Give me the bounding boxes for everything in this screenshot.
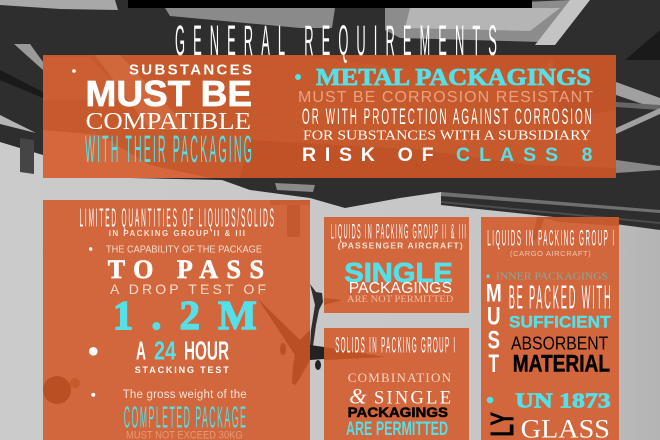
panel: liquids cargo aircraft xyxy=(481,217,619,440)
bullet xyxy=(91,393,95,397)
text: vertical must: M xyxy=(486,280,502,308)
text: risk of: RISK OF xyxy=(302,144,434,166)
text: gross weight: The gross weight of the xyxy=(123,389,247,401)
text: material: MATERIAL xyxy=(513,351,610,378)
text: be packed with: BE PACKED WITH xyxy=(509,280,611,317)
text: class 8: CLASS 8 xyxy=(456,144,593,166)
panel: limited quantities xyxy=(43,200,310,440)
text: rotated ly: LY xyxy=(483,412,520,437)
stat: 1.2 m: 1 . 2 M xyxy=(113,292,257,338)
text: completed package: COMPLETED PACKAGE xyxy=(124,399,246,434)
text: vertical must: U xyxy=(487,302,500,330)
subheading: packing group: IN PACKING GROUP II & III xyxy=(109,229,245,238)
bullet xyxy=(89,347,98,356)
text: drop test: A DROP TEST OF xyxy=(110,281,266,297)
text: packagings: PACKAGINGS xyxy=(349,280,452,297)
bullet xyxy=(487,397,493,403)
text: are not permitted: ARE NOT PERMITTED xyxy=(347,295,453,305)
plane in gap xyxy=(310,284,324,370)
text: packagings: PACKAGINGS xyxy=(348,405,448,420)
heading: limited quantities: LIMITED QUANTITIES OF LIQUIDS/SOLIDS xyxy=(80,205,274,234)
heading: general requirements: GENERAL REQUIREMENTS xyxy=(175,16,497,64)
text: or with protection against corrosion: OR WITH PROTECTION AGAINST CORROSION xyxy=(302,105,592,129)
subheading: (CARGO AIRCRAFT) xyxy=(510,249,591,258)
heading: LIQUIDS IN PACKING GROUP II & III xyxy=(331,221,466,244)
text: un 1873: UN 1873 xyxy=(515,388,611,412)
text: ampersand: & xyxy=(349,383,368,408)
text: are permitted: ARE PERMITTED xyxy=(346,418,448,440)
heading: SOLIDS IN PACKING GROUP I xyxy=(335,333,455,358)
plane shadow in panel xyxy=(258,299,310,385)
text: a 24 hour xyxy=(136,335,229,365)
text: with their packaging: WITH THEIR PACKAGING xyxy=(85,128,252,170)
text: absorbent: ABSORBENT xyxy=(511,332,608,353)
bullet xyxy=(72,69,76,73)
text: combination: COMBINATION xyxy=(348,370,452,385)
panel: general requirements xyxy=(43,16,616,178)
text: single: SINGLE xyxy=(344,257,453,288)
text: substances: SUBSTANCES xyxy=(129,62,252,78)
text: metal packagings: METAL PACKAGINGS xyxy=(316,65,591,91)
subheading: (PASSENGER AIRCRAFT) xyxy=(338,241,463,251)
text: stacking test: STACKING TEST xyxy=(135,365,229,375)
heading: LIQUIDS IN PACKING GROUP I xyxy=(487,226,614,251)
panel: solids packing group xyxy=(324,328,469,440)
text: a 24 hour: 24 xyxy=(154,335,176,365)
text: vertical must xyxy=(486,280,502,378)
text: capability: THE CAPABILITY OF THE PACKAGE xyxy=(106,245,262,256)
text: must be: MUST BE xyxy=(86,73,252,114)
text: to pass: TO PASS xyxy=(108,255,264,284)
text: for substances with a subsidiary: FOR SUBSTANCES WITH A SUBSIDIARY xyxy=(303,128,591,142)
bullet xyxy=(486,275,490,278)
panel: liquids passenger aircraft xyxy=(324,217,469,313)
bullet xyxy=(89,247,92,251)
text: must be corrosion resistant: MUST BE CORROSION RESISTANT xyxy=(298,89,593,106)
text: a 24 hour: A xyxy=(136,335,146,365)
text: inner packagings: INNER PACKAGINGS xyxy=(496,271,608,283)
text: compatible: COMPATIBLE xyxy=(86,109,251,135)
text: a 24 hour: HOUR xyxy=(184,335,229,365)
text: vertical must: T xyxy=(488,350,499,378)
text: sufficient: SUFFICIENT xyxy=(509,314,611,332)
text: vertical must: S xyxy=(488,327,500,355)
bullet xyxy=(295,74,301,80)
text: single: SINGLE xyxy=(374,388,451,408)
